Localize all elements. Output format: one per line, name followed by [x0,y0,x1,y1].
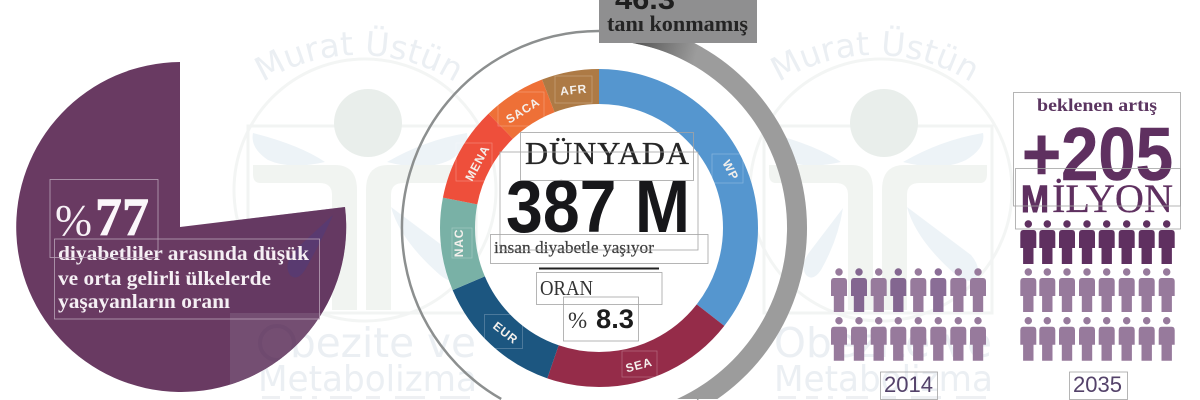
text: expected increase label: beklenen artış [1037,95,1157,115]
watermark: right logo: Obezite ve [774,319,992,367]
segment label: NAC: NAC [452,229,466,257]
pie description: diyabetliler arasında düşük [58,243,310,265]
watermark: right logo: Murat Üstün [770,26,976,81]
segment label: SACA: SACA [503,95,542,126]
watermark showing through pie [230,207,346,385]
pie percentage: % [55,196,92,245]
thin outer ring [402,31,796,399]
grey arc shadow [627,32,698,56]
pictogram: 2035 [1020,220,1175,361]
big number: +205: +205 [1022,112,1173,196]
watermark: left logo: Murat Üstün [254,26,460,81]
segment label: SEA: SEA [624,355,654,375]
panel: pie 77 percent [16,62,360,400]
caption: people living with diabetes: insan diyabetle yaşıyor [494,238,654,257]
pie description [58,243,310,313]
pictogram: 2014 [831,268,986,361]
watermark: right logo: Metabolizma [774,359,993,400]
year label: 2014: 2014 [884,372,933,397]
pie description: ve orta gelirli ülkelerde [58,268,271,290]
watermark: right logo [750,26,1013,400]
segment label: WP: WP [719,158,742,183]
segment label: AFR: AFR [559,82,588,98]
pie shape [16,62,346,392]
pie percentage [55,187,149,247]
callout: undiagnosed [599,0,757,43]
watermark: left logo: Obezite ve [258,319,476,367]
segment label frames [452,76,743,377]
pie description: yaşayanların oranı [58,291,230,313]
donut: regional segments [458,86,740,370]
panel: expected increase [1014,92,1180,229]
rate value: 8.3 [596,304,634,334]
panel: central ring [402,22,807,399]
text: million: İLYON [1052,176,1173,221]
callout: undiagnosed: tanı konmamış [607,11,748,36]
text: million: M [1021,179,1049,221]
rate value [568,304,634,334]
segment label: MENA: MENA [462,143,493,183]
rule [539,268,659,270]
rate value: % [568,308,587,333]
watermark: left logo: Metabolizma [258,359,477,400]
heading: DÜNYADA: DÜNYADA [525,135,689,171]
watermark: left logo [232,26,498,400]
year label: 2035: 2035 [1073,372,1122,397]
text frames [490,132,708,341]
label: ORAN: ORAN [540,276,593,300]
big number: 387 M: 387 M [506,165,690,248]
segment label: EUR: EUR [490,319,521,347]
undiagnosed grey arc [625,22,807,399]
pie percentage: 77 [95,187,149,247]
